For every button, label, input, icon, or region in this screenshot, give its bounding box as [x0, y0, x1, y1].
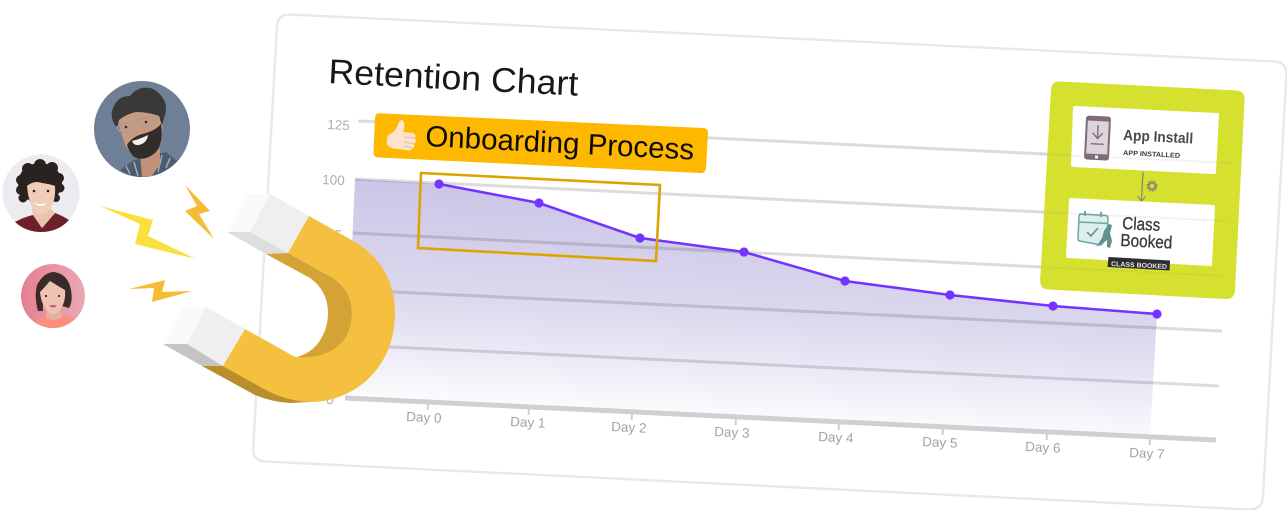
eyes: [125, 126, 127, 128]
badge: class booked: CLASS BOOKED: [1111, 261, 1167, 271]
card: App Install: [1071, 106, 1219, 174]
faint grid lines over funnel panel: [1040, 154, 1232, 276]
lips: [49, 305, 57, 308]
x axis labels: Day 7: [1129, 445, 1165, 462]
avatar: bearded man with glasses: [94, 81, 190, 177]
badge: class booked: [1108, 257, 1170, 271]
arrow: step connector: [1138, 172, 1146, 201]
card title: App Install: App Install: [1123, 127, 1194, 148]
neck: [140, 148, 160, 177]
icon: calendar and runner: [1078, 211, 1112, 248]
bottom pole: [163, 307, 245, 366]
neck: [46, 308, 61, 320]
icon: phone download: [1084, 115, 1111, 161]
maroon top: [15, 213, 69, 232]
magnet body: [223, 216, 395, 402]
y axis labels: 125: [327, 117, 350, 133]
y axis labels: [322, 117, 350, 407]
icon: magnet: [163, 194, 395, 403]
y axis labels: 100: [322, 172, 345, 188]
icon: gear: [1147, 181, 1157, 191]
smile: [34, 203, 47, 206]
y axis labels: 50: [324, 282, 340, 298]
horizontal grid lines: [348, 121, 1232, 386]
beard: [127, 124, 162, 159]
hair: [36, 272, 72, 311]
underside shadow: [202, 366, 310, 403]
y axis labels: 0: [326, 392, 334, 407]
x axis labels: Day 4: [818, 429, 854, 446]
inner shadow: [266, 253, 352, 358]
retention area fill: [345, 179, 1157, 437]
card: Class Booked: [1066, 198, 1215, 271]
x axis labels: Day 0: [406, 409, 442, 426]
eyes: [33, 190, 35, 192]
x axis labels: Day 1: [510, 414, 546, 431]
curly hair: [16, 159, 64, 203]
x axis labels: [406, 409, 1165, 462]
top pole: [227, 194, 309, 254]
glasses: [117, 117, 160, 132]
lightning bolts: [100, 185, 214, 302]
x axis: [345, 398, 1216, 445]
panel: funnel steps: [1040, 81, 1245, 299]
neck: [32, 208, 55, 228]
x axis labels: Day 5: [922, 434, 958, 451]
icon: thumbs up: [387, 120, 416, 150]
x axis labels: Day 6: [1025, 439, 1061, 456]
card title: Class Booked: Class: [1122, 213, 1161, 235]
hair: [112, 88, 166, 128]
face: [40, 281, 65, 314]
heading: Retention Chart: Retention Chart: [328, 53, 580, 104]
y axis labels: 25: [322, 337, 338, 353]
bolt: lower: [129, 280, 192, 302]
card subtitle: APP INSTALLED: [1123, 150, 1180, 160]
card title: Class Booked: Booked: [1120, 230, 1173, 253]
plaid shirt: [120, 152, 177, 177]
bolt: upper: [185, 185, 214, 239]
x axis labels: Day 2: [611, 419, 647, 436]
face: [27, 182, 55, 214]
callout: Onboarding Process: [373, 113, 708, 173]
onboarding highlight box: [418, 173, 660, 261]
y axis labels: 75: [327, 227, 343, 243]
panel: chart card: [253, 14, 1286, 510]
avatar: woman on pink background: [21, 264, 85, 328]
avatar: curly-haired young man: [2, 154, 80, 232]
x axis labels: Day 3: [714, 424, 750, 441]
face: [118, 106, 163, 158]
smile: [132, 135, 148, 145]
eyes: [45, 295, 47, 297]
bolt: large: [100, 206, 196, 259]
callout label: Onboarding Process: [425, 120, 695, 167]
retention line with data points: [434, 179, 1162, 319]
coral top: [35, 316, 75, 328]
